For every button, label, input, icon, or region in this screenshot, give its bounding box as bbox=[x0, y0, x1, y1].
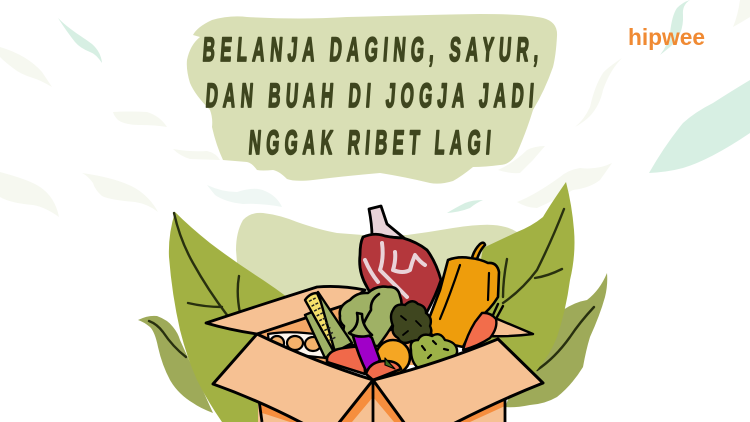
big left leaf bbox=[169, 212, 320, 422]
bell pepper bbox=[428, 243, 499, 347]
background leaves bbox=[0, 0, 750, 217]
green broccoli bbox=[411, 334, 457, 368]
small right leaf bbox=[505, 273, 607, 407]
tomato bbox=[366, 358, 401, 380]
title text: DAN BUAH DI JOGJA JADI bbox=[204, 77, 535, 115]
title background blob bbox=[187, 14, 557, 184]
back flap: right bbox=[485, 318, 533, 336]
corn bbox=[305, 292, 352, 358]
orange fruit bbox=[376, 340, 410, 374]
left front flap bbox=[213, 334, 373, 422]
meat bbox=[360, 206, 441, 330]
egg carton bbox=[268, 332, 326, 358]
lettuce bbox=[340, 287, 402, 346]
title text: NGGAK RIBET LAGI bbox=[247, 124, 492, 162]
box front side bbox=[258, 380, 505, 422]
back flap: left bbox=[206, 286, 440, 365]
carrot bbox=[463, 304, 503, 350]
title text: BELANJA DAGING, SAYUR, bbox=[201, 31, 540, 69]
pale green blob behind box bbox=[236, 213, 520, 300]
dark broccoli bbox=[391, 301, 431, 343]
apple bbox=[327, 347, 365, 374]
title text bbox=[201, 31, 540, 162]
eggplant bbox=[349, 313, 380, 373]
small left leaf bbox=[138, 316, 213, 413]
right front flap bbox=[373, 339, 543, 422]
big right leaf bbox=[470, 182, 574, 400]
hipwee logo: hipwee bbox=[628, 24, 705, 50]
